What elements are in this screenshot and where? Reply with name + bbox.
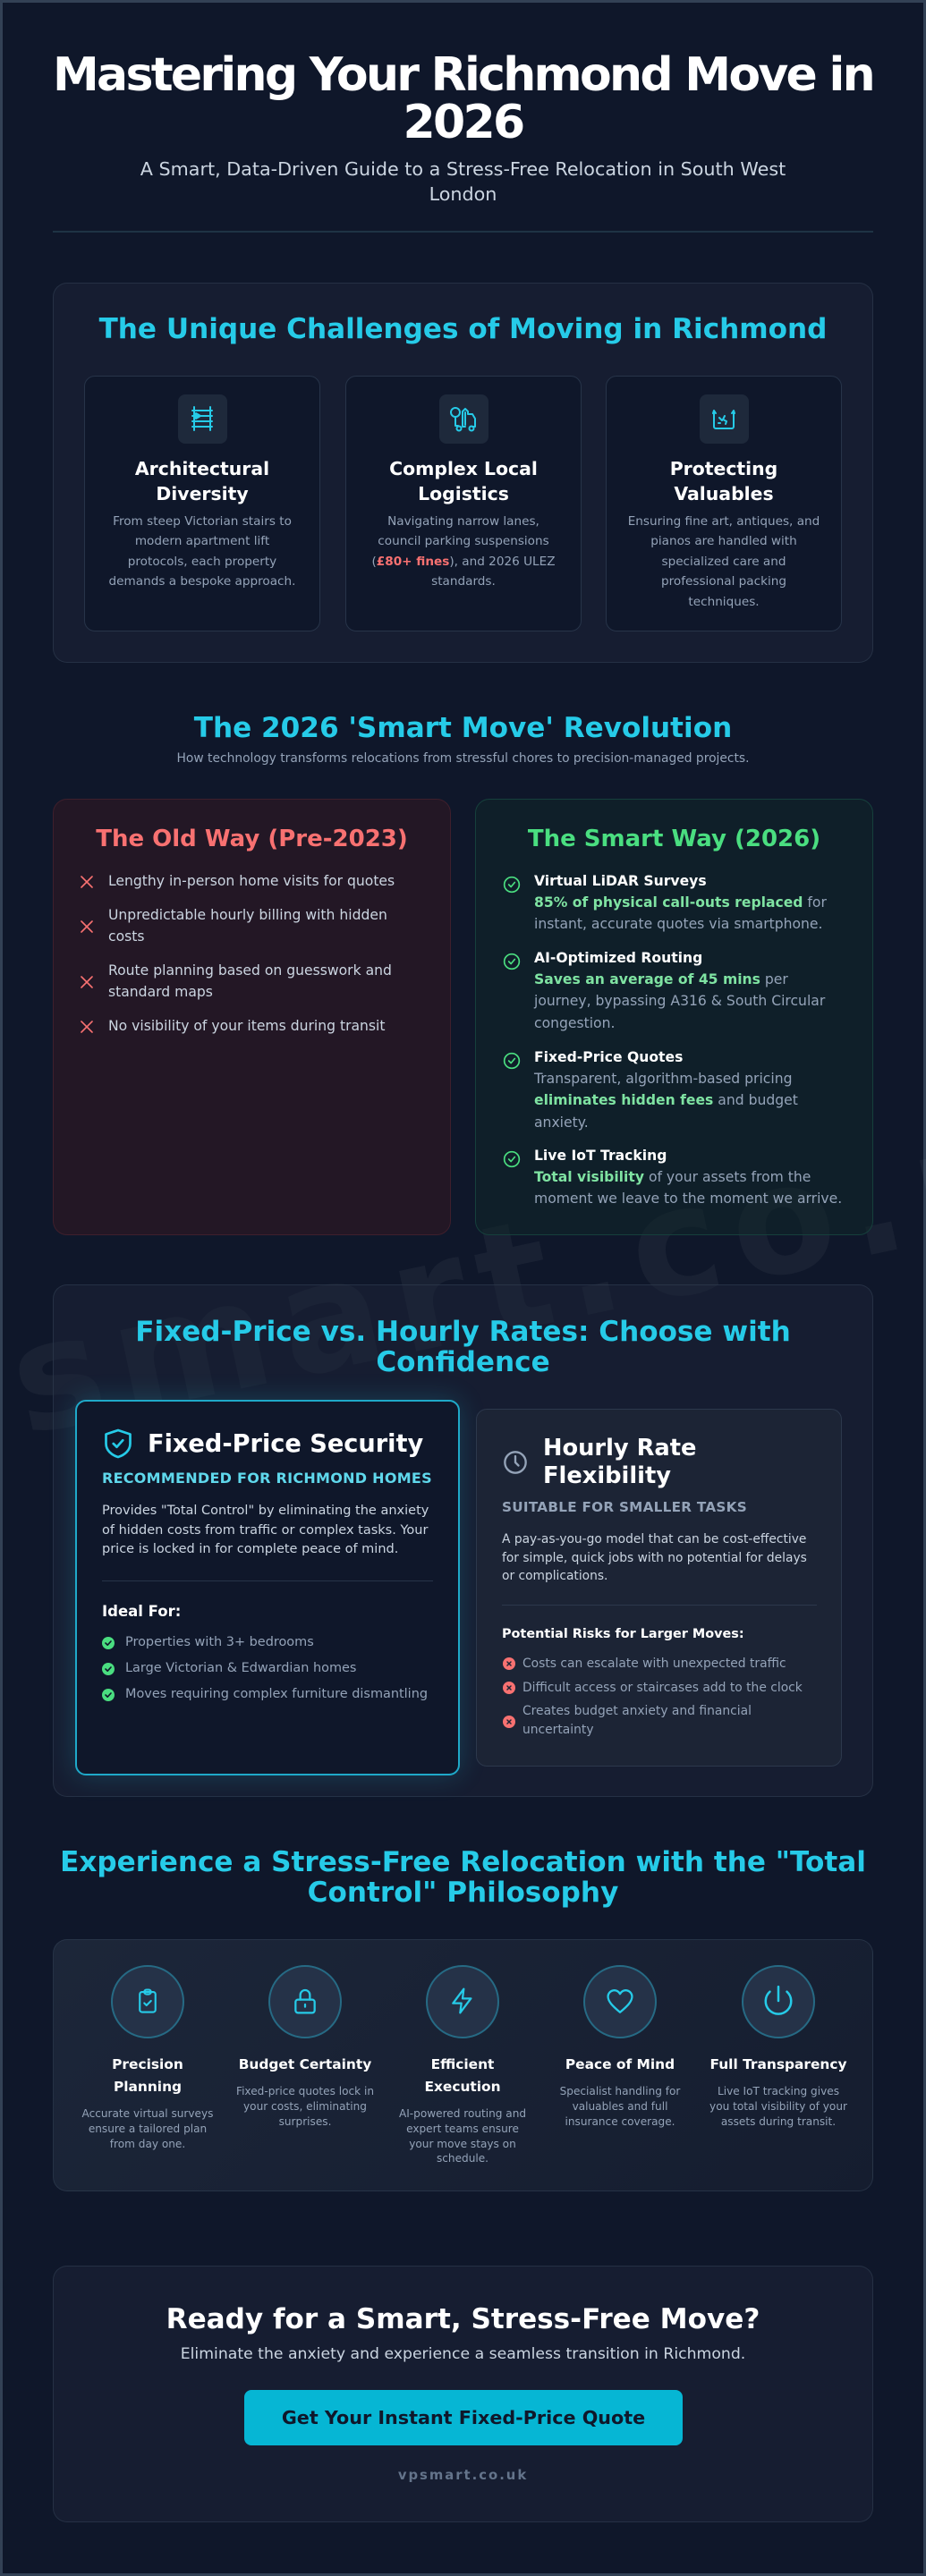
card title: Architectural (135, 458, 269, 479)
button: Get Your Instant Fixed-Price Quote (282, 2407, 645, 2428)
description: for simple, quick jobs with no potential for delays (502, 1551, 807, 1565)
card: architectural diversity (84, 376, 320, 631)
card title (135, 458, 269, 504)
card text: protocols, each property (128, 555, 276, 569)
pillar title: Full Transparency (709, 2056, 847, 2072)
card title (543, 1435, 696, 1489)
pillar text (399, 2107, 526, 2165)
item: routing: journey, bypassing A316 & South Circular (534, 993, 825, 1009)
title: Mastering Your Richmond Move in (53, 48, 873, 102)
icon: lightning (426, 1965, 499, 2038)
icon: clock (504, 1451, 527, 1474)
subtitle: London (429, 183, 497, 205)
pillar: precision planning (82, 1965, 213, 2150)
item: lidar: 85% of physical call-outs replaced for (534, 894, 827, 911)
icon: power (742, 1965, 815, 2038)
item (503, 1704, 752, 1737)
card text: (£80+ fines), and 2026 ULEZ (371, 555, 556, 569)
pillar text (236, 2085, 374, 2128)
pillar title (424, 2056, 501, 2095)
item: quotes: Transparent, algorithm-based pricing (534, 1071, 792, 1087)
item (81, 962, 392, 1000)
pillar text: AI-powered routing and (399, 2107, 526, 2120)
card title: Hourly Rate (543, 1435, 696, 1462)
item: Difficult access or staircases add to the clock (522, 1681, 803, 1695)
pillar text: assets during transit. (721, 2115, 836, 2128)
heading: total control: Experience a Stress-Free Relocation with the "Total (60, 1846, 866, 1878)
card text: demands a bespoke approach. (109, 574, 295, 589)
item: uncertainty (522, 1723, 594, 1737)
description: of hidden costs from traffic or complex tasks. Your (102, 1523, 428, 1538)
card title: Complex Local (389, 458, 538, 479)
icon: heart (583, 1965, 657, 2038)
heading: total control (60, 1846, 866, 1909)
item: tracking: moment we leave to the moment we arrive. (534, 1191, 842, 1207)
section subheading: How technology transforms relocations from stressful chores to precision-managed projects. (176, 751, 750, 766)
item: routing: congestion. (534, 1015, 615, 1031)
pillar text: surprises. (279, 2115, 331, 2128)
item: tracking (503, 1148, 842, 1207)
card text: council parking suspensions (378, 534, 549, 548)
heading: smart move revolution: The 2026 'Smart Move' Revolution (194, 712, 732, 744)
heading: total control: Control" Philosophy (308, 1877, 618, 1909)
pillar: efficient execution (399, 1965, 526, 2165)
pillar text (698, 2084, 859, 2129)
card text: techniques. (688, 595, 760, 609)
card: protecting valuables (606, 376, 842, 631)
pillar text: Specialist handling for (560, 2085, 680, 2097)
card text: Ensuring fine art, antiques, and (628, 514, 820, 529)
card text: professional packing (661, 574, 786, 589)
panel: pricing comparison (53, 1284, 873, 1797)
item: quotes: eliminates hidden fees and budget (534, 1092, 798, 1108)
item: routing: AI-Optimized Routing (534, 950, 702, 966)
item: tracking: Live IoT Tracking (534, 1148, 667, 1164)
item (81, 907, 387, 945)
pillar text: Fixed-price quotes lock in (236, 2085, 374, 2097)
pillar: budget certainty (236, 1965, 374, 2128)
pillar title: Peace of Mind (565, 2056, 675, 2072)
item: Unpredictable hourly billing with hidden (108, 907, 387, 923)
pillar text: schedule. (437, 2152, 488, 2165)
pillar text: Live IoT tracking gives (718, 2085, 839, 2097)
pillar title: Budget Certainty (239, 2056, 371, 2072)
pillar text (539, 2084, 701, 2129)
panel: smart way (475, 799, 873, 1235)
card title (670, 458, 777, 504)
item: Costs can escalate with unexpected traffic (522, 1657, 786, 1671)
pillar text: valuables and full (573, 2100, 667, 2113)
description: price is locked in for complete peace of mind. (102, 1542, 398, 1556)
description (502, 1532, 807, 1583)
pillar text: from day one. (110, 2138, 185, 2150)
item: lidar: Virtual LiDAR Surveys (534, 873, 707, 889)
old way list (81, 873, 395, 1034)
description: or complications. (502, 1569, 607, 1583)
pillar title: Planning (114, 2079, 182, 2095)
pillar text: expert teams ensure (406, 2123, 519, 2135)
item: Creates budget anxiety and financial (522, 1704, 752, 1718)
item: Lengthy in-person home visits for quotes (108, 873, 395, 889)
title: 2026 (404, 96, 522, 149)
pillar title (112, 2056, 183, 2095)
item: lidar: instant, accurate quotes via smartphone. (534, 916, 822, 932)
panel heading: The Smart Way (2026) (528, 826, 820, 852)
icon: stairs (178, 394, 227, 444)
card text (109, 514, 295, 589)
card text (628, 514, 820, 609)
pillar title: Execution (424, 2079, 501, 2095)
pillar text: your move stays on (409, 2138, 516, 2150)
card text: From steep Victorian stairs to (113, 514, 292, 529)
item: Moves requiring complex furniture dismantling (125, 1687, 428, 1701)
cta text: Eliminate the anxiety and experience a seamless transition in Richmond. (181, 2345, 745, 2363)
item: Properties with 3+ bedrooms (125, 1635, 314, 1649)
list heading: Potential Risks for Larger Moves: (502, 1627, 744, 1641)
item: quotes (503, 1049, 798, 1131)
icon: shield (105, 1429, 132, 1458)
heading: challenges: The Unique Challenges of Moving in Richmond (99, 313, 827, 345)
card text (371, 514, 556, 589)
button (244, 2390, 683, 2445)
subtitle (140, 158, 786, 205)
recommendation label: RECOMMENDED FOR RICHMOND HOMES (102, 1470, 432, 1487)
heading: pricing comparison: Fixed-Price vs. Hourly Rates: Choose with (135, 1316, 791, 1348)
card text: modern apartment lift (135, 534, 269, 548)
pillar title: Precision (112, 2056, 183, 2072)
card title: Diversity (156, 483, 249, 504)
pillar: full transparency (698, 1940, 859, 2190)
subtitle: A Smart, Data-Driven Guide to a Stress-Free Relocation in South West (140, 158, 786, 180)
panel heading: The Old Way (Pre-2023) (96, 826, 408, 852)
heading: pricing comparison (135, 1316, 791, 1378)
pillar title: Efficient (431, 2056, 494, 2072)
item: routing: Saves an average of 45 mins per (534, 971, 788, 987)
card title (389, 458, 538, 504)
description: A pay-as-you-go model that can be cost-effective (502, 1532, 806, 1546)
card: fixed price (75, 1400, 460, 1775)
item: quotes: anxiety. (534, 1114, 589, 1131)
pillar text: ensure a tailored plan (89, 2123, 207, 2135)
pillar: peace of mind (539, 1940, 701, 2190)
icon: lock (268, 1965, 342, 2038)
description: Provides "Total Control" by eliminating the anxiety (102, 1504, 429, 1518)
icon: van and pin (439, 394, 488, 444)
list heading: Ideal For: (102, 1603, 181, 1620)
card text: pianos are handled with (650, 534, 797, 548)
pillar text: you total visibility of your (709, 2100, 847, 2113)
item: tracking: Total visibility of your assets from the (534, 1169, 811, 1185)
pillar text: your costs, eliminating (243, 2100, 367, 2113)
ideal list (102, 1635, 428, 1701)
website: vpsmart.co.uk (398, 2468, 528, 2483)
cta heading: Ready for a Smart, Stress-Free Move? (166, 2303, 760, 2335)
card title: Protecting (670, 458, 777, 479)
pillar text (82, 2107, 213, 2150)
card: hourly rate (476, 1409, 842, 1767)
item: No visibility of your items during transit (108, 1018, 385, 1034)
suitability label: SUITABLE FOR SMALLER TASKS (502, 1499, 747, 1515)
item: quotes: Fixed-Price Quotes (534, 1049, 683, 1065)
icon: fragile box (700, 394, 749, 444)
card: local logistics (345, 376, 582, 631)
item: lidar (503, 873, 827, 932)
item: routing (503, 950, 825, 1031)
item: Large Victorian & Edwardian homes (125, 1661, 356, 1675)
card title: Logistics (418, 483, 509, 504)
item: standard maps (108, 984, 213, 1000)
card text: specialized care and (661, 555, 786, 569)
item: costs (108, 928, 144, 945)
pillar text: Accurate virtual surveys (82, 2107, 213, 2120)
panel: challenges (53, 283, 873, 663)
card title: Valuables (674, 483, 774, 504)
heading: pricing comparison: Confidence (376, 1346, 550, 1378)
description (102, 1504, 429, 1556)
card title: Flexibility (543, 1462, 671, 1489)
title (53, 48, 873, 149)
panel: call to action (53, 2266, 873, 2522)
risk list (503, 1657, 803, 1737)
card title: Fixed-Price Security (148, 1430, 423, 1458)
item: Route planning based on guesswork and (108, 962, 392, 979)
pillar text: insurance coverage. (565, 2115, 675, 2128)
panel: total control (53, 1939, 873, 2191)
card text: Navigating narrow lanes, (387, 514, 539, 529)
card text: standards. (431, 574, 496, 589)
panel: old way (53, 799, 451, 1235)
icon: clipboard (111, 1965, 184, 2038)
